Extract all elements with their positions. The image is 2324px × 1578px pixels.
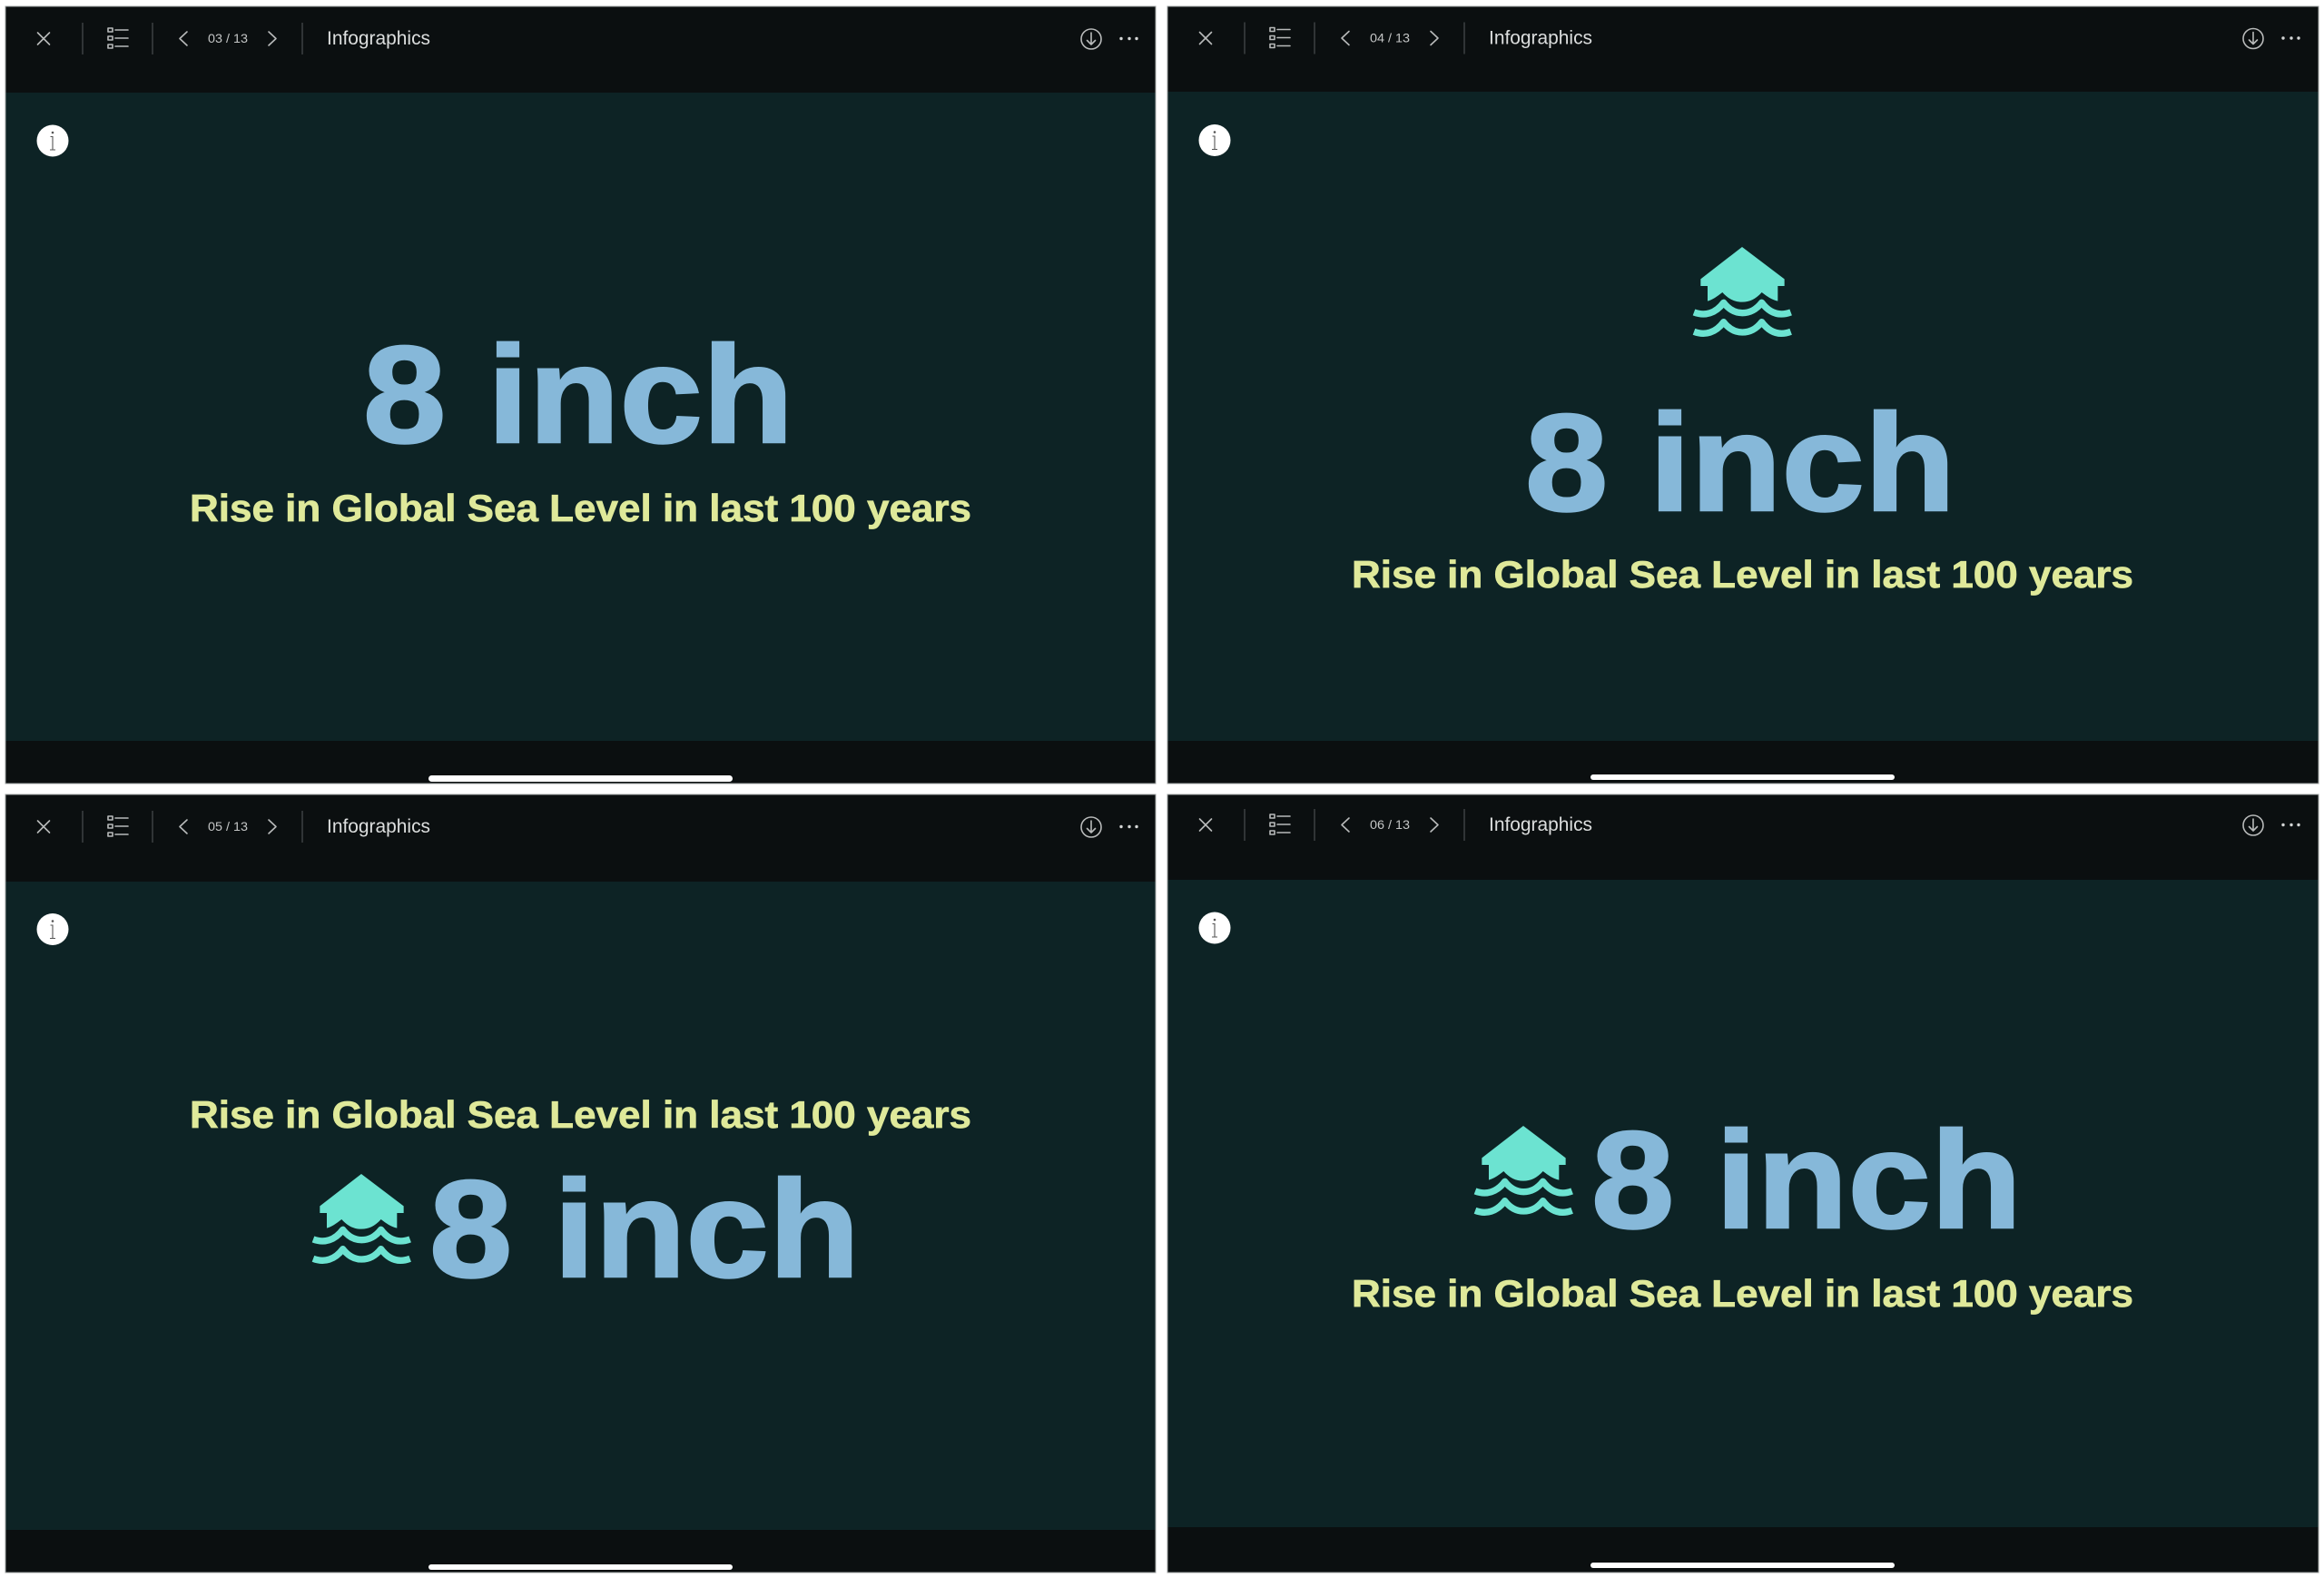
toolbar: slide 03 — [38, 23, 1138, 54]
home indicator — [1590, 1563, 1895, 1568]
toolbar: slide 03: 03 / 13 — [208, 32, 248, 45]
home indicator — [428, 1564, 733, 1570]
stat: 8 inch: 8 inch — [1591, 1103, 2022, 1257]
caption: sea level rise: Rise in Global Sea Level in last 100 years — [190, 1093, 971, 1136]
toolbar: slide 05: Infographics — [327, 816, 430, 837]
stat: 8 inch: 8 inch — [363, 318, 793, 472]
panel: slide 03 of 13 — [5, 6, 1156, 784]
panel: slide 06 of 13 — [1167, 794, 2319, 1573]
icon: info button — [36, 125, 69, 156]
icon: info button — [1198, 912, 1231, 944]
panel: slide 04 of 13 — [1167, 6, 2319, 784]
caption: sea level rise: Rise in Global Sea Level in last 100 years — [1352, 553, 2133, 596]
toolbar: slide 05 — [38, 811, 1138, 843]
stat: 8 inch: 8 inch — [429, 1152, 860, 1307]
home indicator — [1590, 774, 1895, 780]
toolbar: slide 04: Infographics — [1489, 27, 1592, 49]
icon: flooded house — [1475, 1126, 1572, 1212]
icon: info button — [1198, 124, 1231, 156]
toolbar: slide 03: Infographics — [327, 28, 430, 49]
stat: 8 inch: 8 inch — [1525, 386, 1955, 540]
toolbar: slide 06: Infographics — [1489, 814, 1592, 835]
toolbar: slide 06: 06 / 13 — [1370, 818, 1410, 832]
toolbar: slide 06 — [1200, 809, 2300, 841]
toolbar: slide 04: 04 / 13 — [1370, 31, 1410, 45]
caption: sea level rise: Rise in Global Sea Level in last 100 years — [190, 487, 971, 529]
panel: slide 05 of 13 — [5, 794, 1156, 1573]
icon: flooded house — [313, 1174, 410, 1260]
toolbar: slide 05: 05 / 13 — [208, 820, 248, 833]
toolbar: slide 04 — [1200, 22, 2300, 54]
icon: flooded house — [1694, 247, 1791, 333]
caption: sea level rise: Rise in Global Sea Level in last 100 years — [1352, 1272, 2133, 1315]
home indicator — [428, 775, 733, 782]
icon: info button — [36, 913, 69, 945]
